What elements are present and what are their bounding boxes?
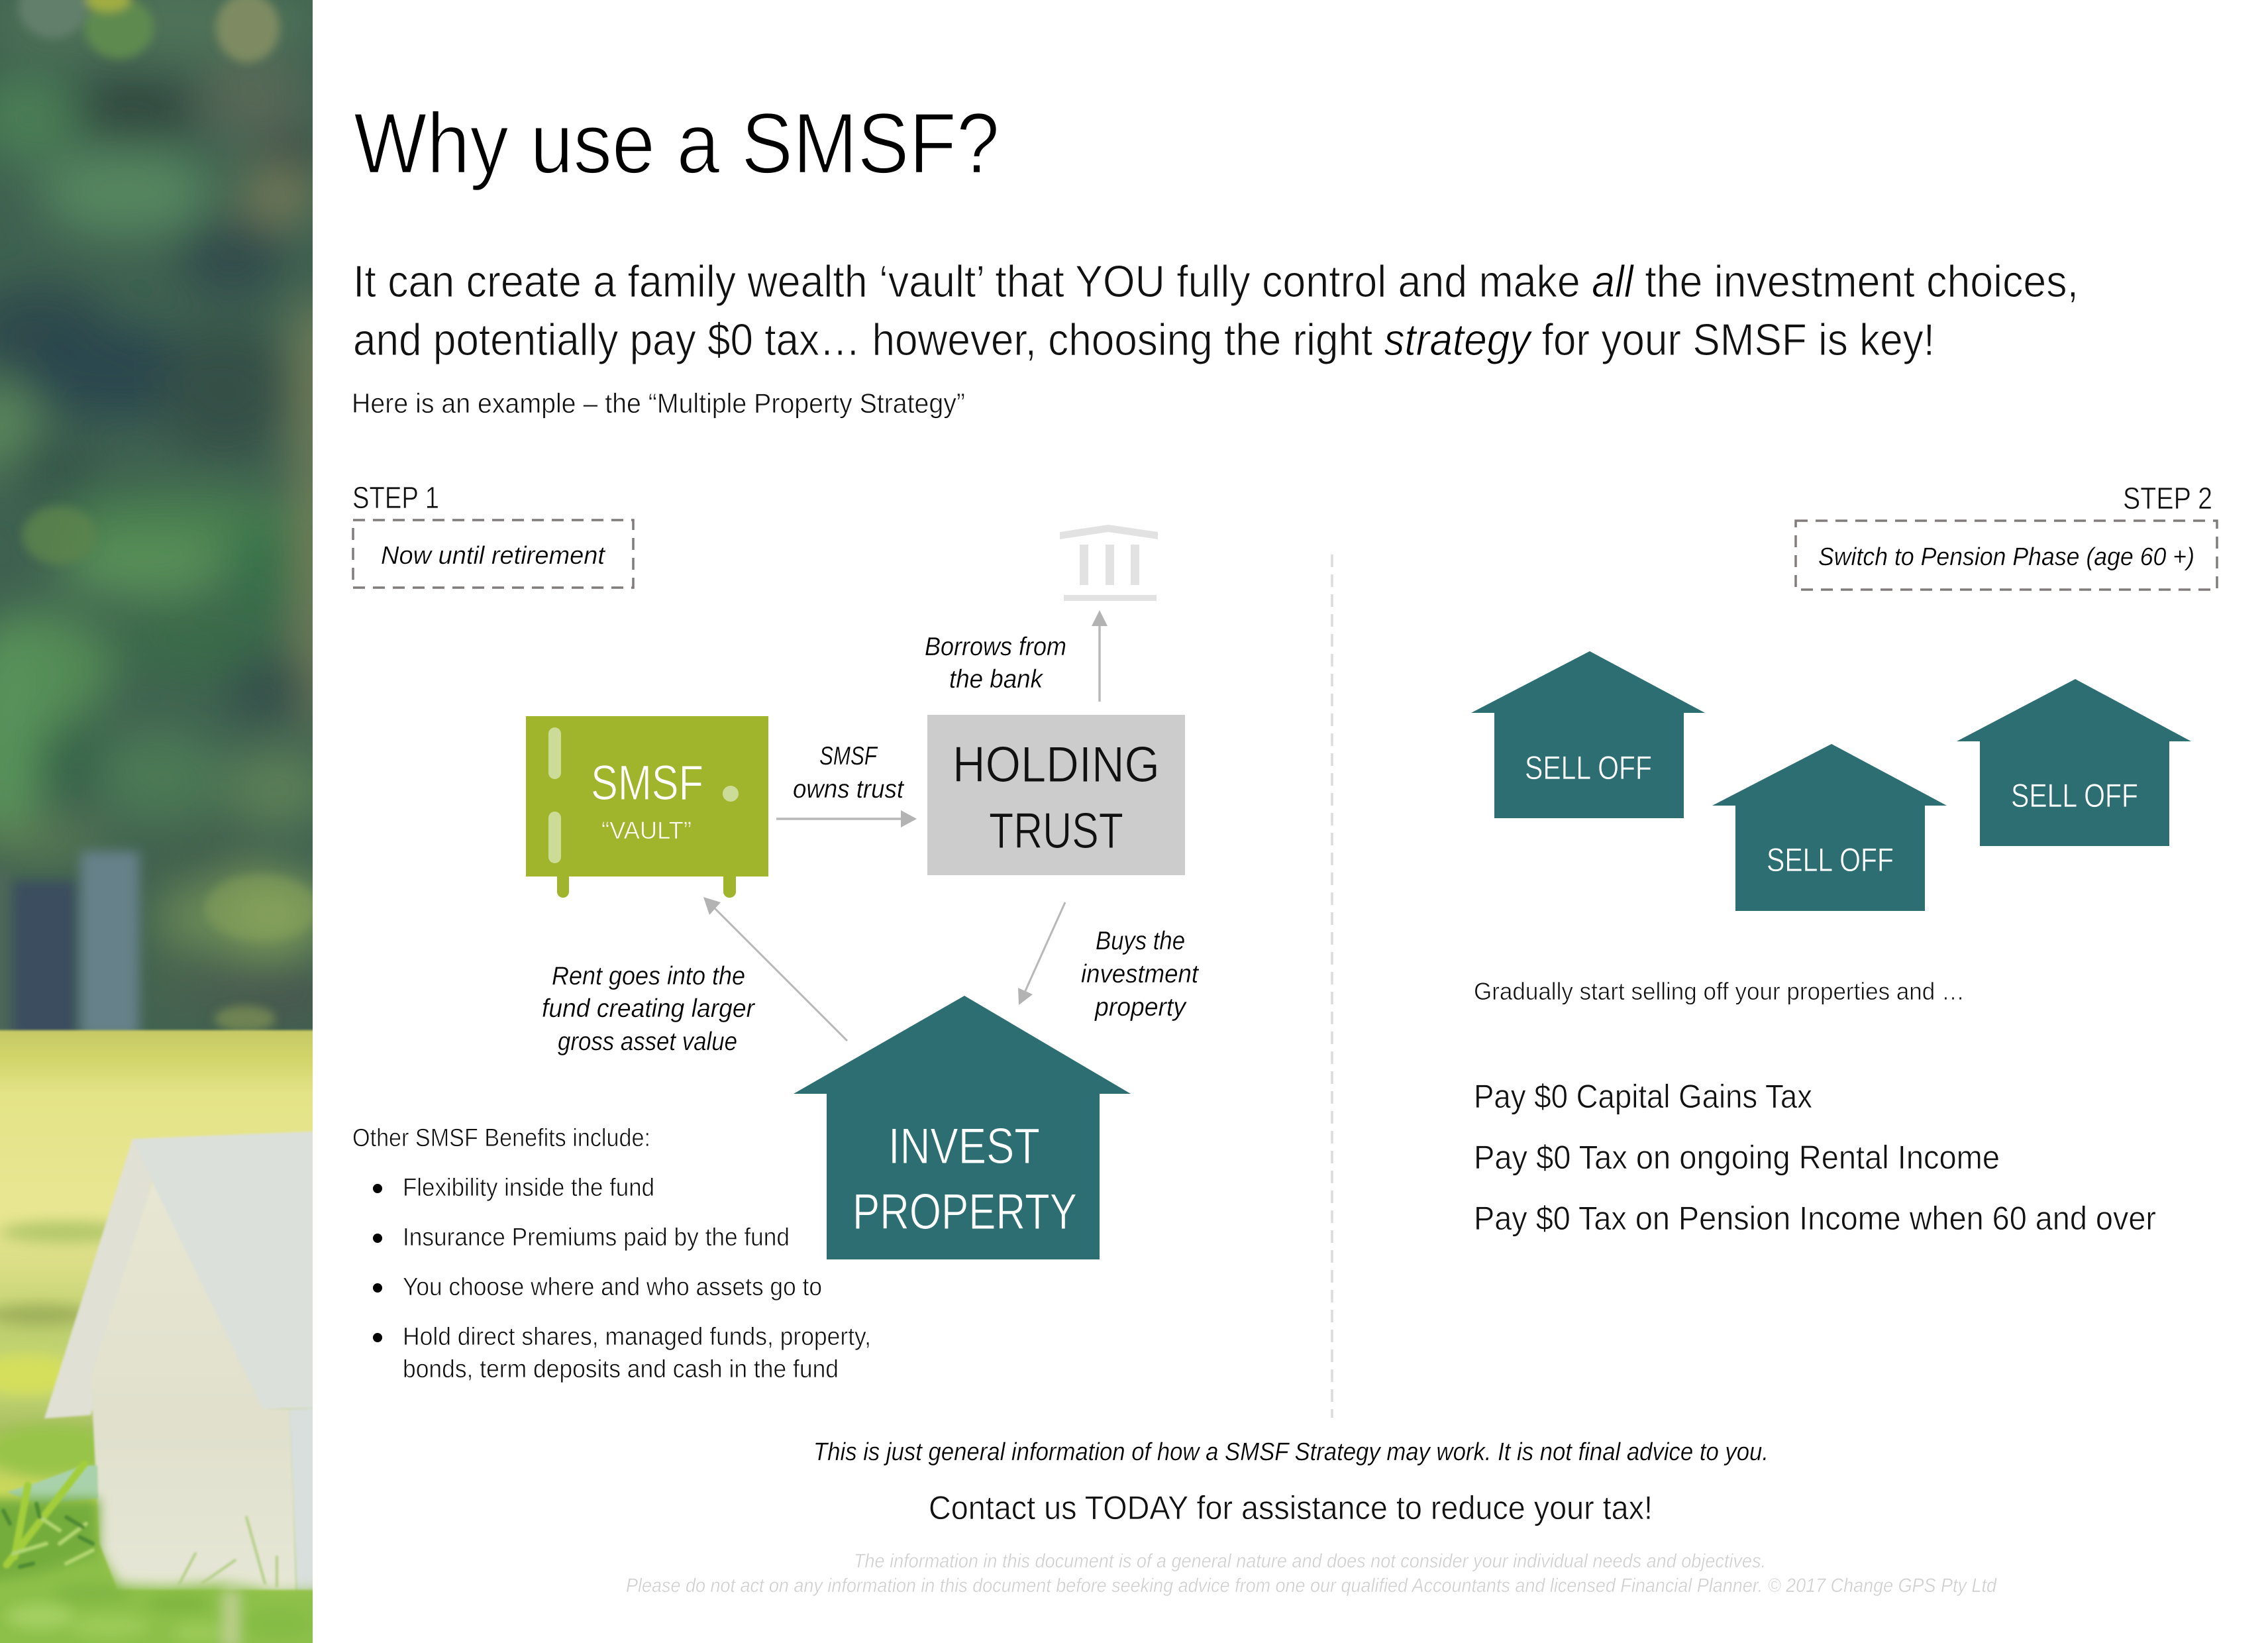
label: buys the investment property	[1081, 927, 1200, 1022]
photo: blurred post in the distance	[0, 851, 139, 1040]
legal small print	[626, 1550, 1997, 1597]
house: invest property: PROPERTY	[852, 1184, 1077, 1240]
label: buys the investment property: Buys the	[1096, 927, 1185, 955]
label: SMSF owns trust	[793, 742, 905, 804]
step 2 label: STEP 2	[2123, 481, 2212, 515]
label: SMSF owns trust: SMSF	[819, 742, 878, 770]
label: SMSF owns trust: owns trust	[793, 775, 905, 804]
step 1 box text: Now until retirement	[381, 542, 605, 570]
house: sell off 2	[1712, 744, 1947, 911]
legal small print: The information in this document is of a general nature and does not consider your individual needs and objectives.	[854, 1550, 1766, 1572]
photo: foreground grass and leaf	[0, 1464, 338, 1643]
intro paragraph	[353, 256, 2079, 365]
box: holding trust	[927, 715, 1185, 875]
benefit 3: You choose where and who assets go to	[403, 1273, 822, 1301]
benefit 4: bonds, term deposits and cash in the fund	[403, 1355, 839, 1383]
label: buys the investment property: investment	[1081, 960, 1200, 988]
leaf behind grass	[7, 1465, 98, 1505]
icon: bank	[1060, 525, 1158, 601]
label: rent goes into the fund: gross asset value	[558, 1028, 737, 1056]
label: borrows from the bank: Borrows from	[925, 633, 1066, 661]
tax benefits list	[1474, 1078, 2156, 1237]
step 1 dashed box	[353, 520, 633, 588]
vault handle	[723, 786, 739, 802]
arrow: trust buys property	[1018, 902, 1065, 1005]
blurred front grass	[0, 1554, 338, 1643]
step 2 box text: Switch to Pension Phase (age 60 +)	[1818, 543, 2194, 571]
vault body	[526, 716, 768, 876]
example line: Here is an example – the “Multiple Property Strategy”	[352, 388, 965, 419]
photo: sunlit lawn and grass	[0, 1028, 313, 1603]
vault legs	[557, 874, 736, 898]
photo: blurred forest background	[0, 0, 313, 1032]
box: holding trust: HOLDING	[953, 737, 1160, 793]
title: Why use a SMSF?	[354, 95, 1000, 191]
vault heading: SMSF	[591, 755, 703, 810]
label: borrows from the bank: the bank	[949, 665, 1044, 694]
vault: SMSF	[526, 716, 768, 898]
call to action: Contact us TODAY for assistance to reduce your tax!	[929, 1489, 1653, 1526]
label: buys the investment property: property	[1094, 993, 1187, 1022]
benefit 4: Hold direct shares, managed funds, property,	[403, 1323, 871, 1351]
house: sell off 1	[1471, 651, 1705, 818]
arrow: trust to bank	[1092, 610, 1108, 702]
label: rent goes into the fund: Rent goes into the	[552, 962, 745, 990]
photo: bokeh highlights	[19, 0, 318, 1032]
tax benefit 1: Pay $0 Capital Gains Tax	[1474, 1078, 1812, 1115]
benefit 4	[373, 1323, 871, 1383]
intro line 2: and potentially pay $0 tax… however, choosing the right strategy for your SMSF is key!	[353, 315, 1935, 365]
house: sell off 3: SELL OFF	[2011, 777, 2138, 814]
vault subheading: “VAULT”	[601, 817, 692, 844]
vault hinges	[548, 727, 561, 863]
tax benefit 2: Pay $0 Tax on ongoing Rental Income	[1474, 1139, 2000, 1176]
box: holding trust: TRUST	[989, 803, 1123, 859]
panel: blurred garden photo with paper house	[0, 0, 344, 1643]
photo: paper house	[44, 1131, 326, 1590]
step 2 dashed box	[1796, 521, 2217, 590]
label: rent goes into the fund: fund creating larger	[542, 994, 756, 1023]
tax benefit 3: Pay $0 Tax on Pension Income when 60 and over	[1474, 1200, 2156, 1237]
arrow: SMSF to trust	[776, 810, 917, 827]
disclaimer line: This is just general information of how a SMSF Strategy may work. It is not final advice to you.	[813, 1438, 1769, 1466]
sharp grass blades	[3, 1464, 277, 1587]
text: gradually sell: Gradually start selling off your properties and …	[1474, 978, 1965, 1005]
house: sell off 1: SELL OFF	[1525, 749, 1652, 786]
arrow: rent to SMSF	[703, 897, 847, 1041]
intro line 1: It can create a family wealth ‘vault’ that YOU fully control and make all the investment choices,	[353, 256, 2079, 307]
house: sell off 3	[1957, 679, 2191, 846]
house: sell off 2: SELL OFF	[1767, 841, 1894, 878]
label: rent goes into the fund	[542, 962, 756, 1056]
legal small print: Please do not act on any information in this document before seeking advice from one our qualified Accountants and licensed Financial Planner. © 2017 Change GPS Pty Ltd	[626, 1575, 1997, 1597]
benefits list	[352, 1124, 871, 1383]
benefit 1: Flexibility inside the fund	[403, 1174, 654, 1202]
benefits heading: Other SMSF Benefits include:	[352, 1124, 650, 1152]
house: invest property	[794, 996, 1131, 1259]
label: borrows from the bank	[925, 633, 1066, 694]
house: invest property: INVEST	[888, 1118, 1040, 1175]
benefit 2: Insurance Premiums paid by the fund	[403, 1224, 790, 1251]
dark grass patch on left	[0, 1499, 99, 1591]
step 1 label: STEP 1	[352, 480, 439, 515]
